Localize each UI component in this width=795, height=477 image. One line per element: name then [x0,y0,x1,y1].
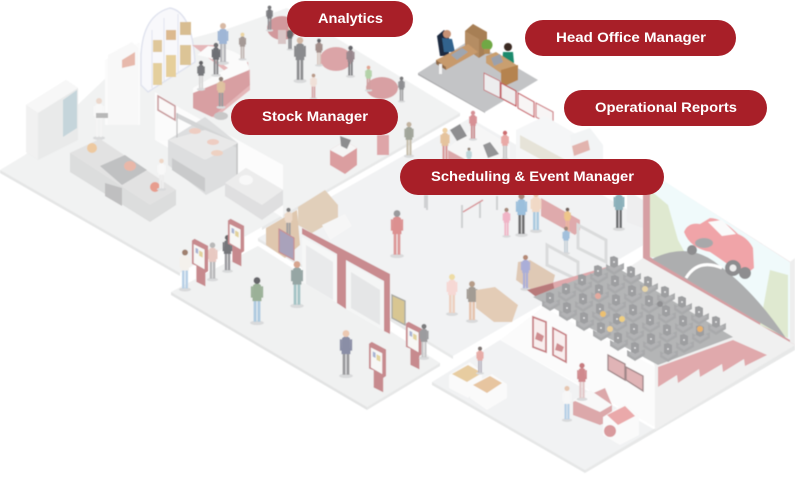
turnstiles [547,225,606,280]
lobby bench [476,260,555,322]
plant [482,40,492,54]
office floor [418,40,538,113]
callout: Stock Manager: Stock Manager [262,108,369,124]
fridge cabinet with bottles [108,42,138,125]
foyer wall posters [533,317,643,391]
seated guest [284,208,293,238]
callout: Stock Manager [231,99,398,135]
chef at counter [157,159,166,191]
ticket staff [404,111,509,170]
callout: Analytics [287,1,413,37]
floor: main lobby [258,118,666,359]
walking guests [250,210,478,378]
callout: Operational Reports [564,90,767,126]
concession counter [573,388,639,445]
bar counter [192,45,250,120]
fridge [26,80,78,160]
food display shelves [168,113,238,195]
floor: restaurant and kitchen [0,8,460,276]
waiter [293,37,307,83]
candy bins [449,362,507,410]
wall: kitchen partition [105,42,283,218]
queue at kiosks [179,235,233,292]
restaurant tables and diners [266,6,405,103]
callout: Analytics: Analytics [318,10,383,26]
snack shelves [516,116,603,190]
bar people [197,23,246,109]
red car on screen [684,218,754,279]
floor: entrance [171,246,440,410]
office cabinet [465,24,487,58]
POS counter by restaurant [330,135,389,174]
candy shopper [476,347,484,375]
lobby poster [279,229,294,260]
lobby sofas [266,190,352,258]
concession staff and customer [562,363,587,422]
floor: cinema foyer [432,258,795,473]
menu board [155,96,180,142]
kitchen counter [70,139,176,222]
kitchen sink counter [225,168,283,220]
callout: Scheduling & Event Manager: Scheduling & Event Manager [431,168,635,184]
cinema seats [533,256,733,365]
callout: Head Office Manager: Head Office Manager [556,29,707,45]
chef [93,98,113,140]
report cards [484,73,553,126]
head office manager at desk [436,30,478,74]
side wall poster [392,295,405,325]
callout: Head Office Manager [525,20,736,56]
callout: Operational Reports: Operational Reports [595,99,737,115]
lobby guests and snack bar [502,189,643,255]
queue barriers [425,195,497,228]
kiosks [192,219,422,392]
red stepped aisle [658,340,767,387]
arched drinks shelf [141,8,195,92]
right wall frame [790,258,795,345]
cinema screen [643,168,795,345]
entrance doors and red frame [302,228,390,334]
callout: Scheduling & Event Manager [400,159,664,195]
assistant at desk [486,43,518,86]
guest on sofa [520,255,531,291]
ticket counter [445,124,510,170]
red carpet behind seats [527,265,640,305]
